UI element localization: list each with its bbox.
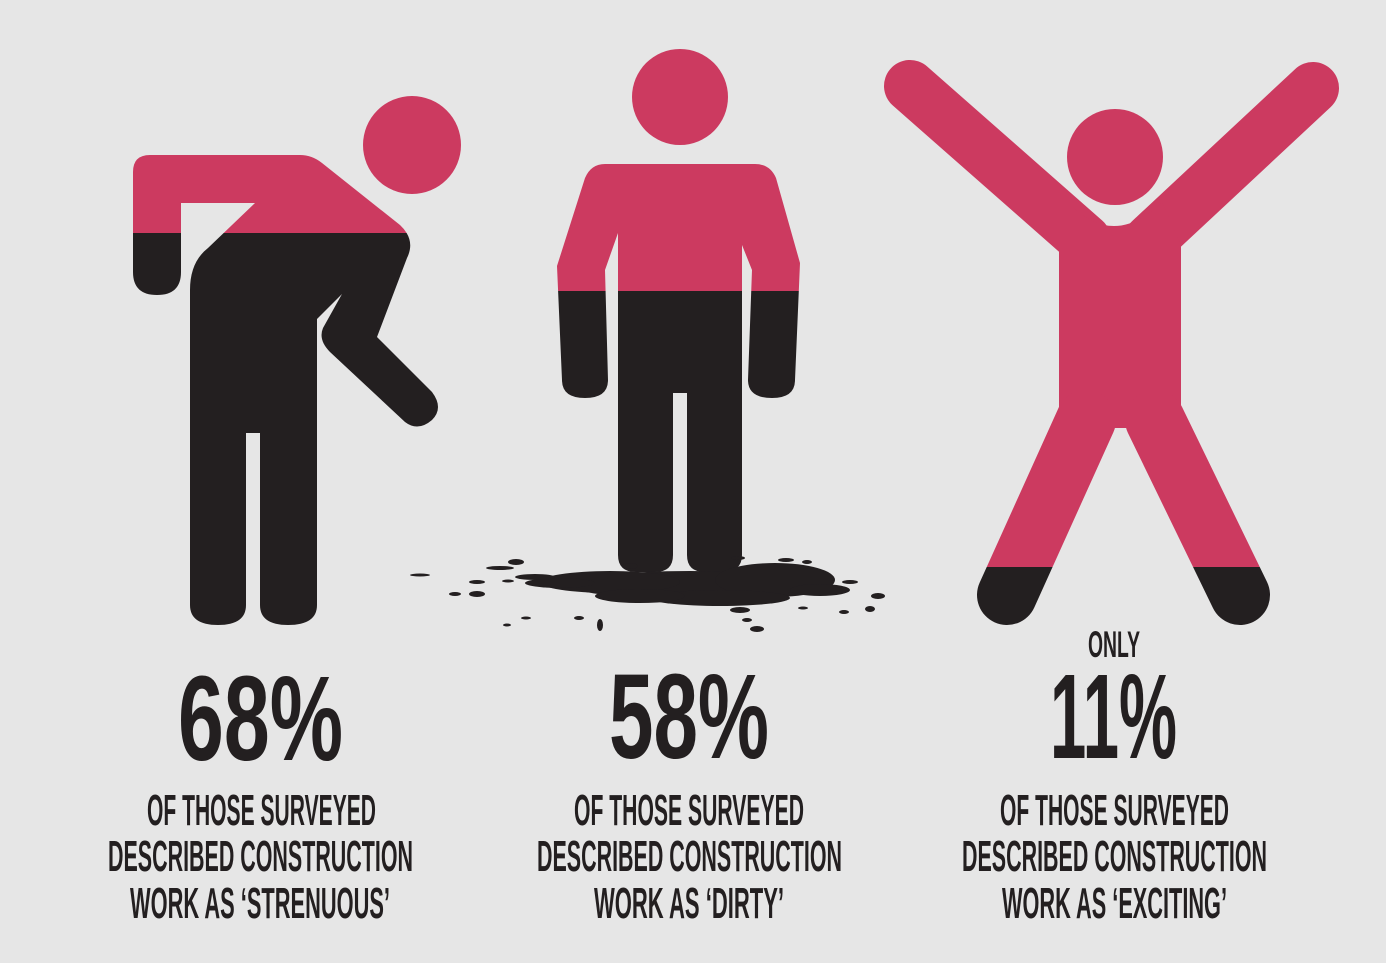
stat: 68% strenuous: WORK AS ‘STRENUOUS’ (130, 879, 390, 928)
figure: exciting (jumping with arms up) (910, 86, 1313, 595)
head (632, 49, 728, 145)
stat: 58% dirty: OF THOSE SURVEYED (574, 786, 804, 835)
stat: only 11% exciting: ONLY (1088, 624, 1140, 665)
stat: only 11% exciting (962, 624, 1267, 928)
figure: dirty (standing in mud) (410, 49, 885, 632)
stat: 58% dirty (537, 648, 842, 928)
mud splatter (410, 556, 885, 632)
figure: strenuous (bent over holding back) (133, 96, 461, 625)
stat: 68% strenuous: OF THOSE SURVEYED (147, 786, 376, 835)
stat: 68% strenuous (108, 650, 413, 928)
text: DESCRIBED CONSTRUCTION (108, 832, 413, 881)
text: DESCRIBED CONSTRUCTION (537, 832, 842, 881)
head (1067, 109, 1163, 205)
stat: 58% dirty: WORK AS ‘DIRTY’ (594, 879, 784, 928)
stat: 68% strenuous: 68% (178, 650, 343, 786)
stat: 58% dirty: 58% (609, 648, 769, 784)
stat: only 11% exciting: 11% (1050, 648, 1177, 784)
head (363, 96, 461, 194)
